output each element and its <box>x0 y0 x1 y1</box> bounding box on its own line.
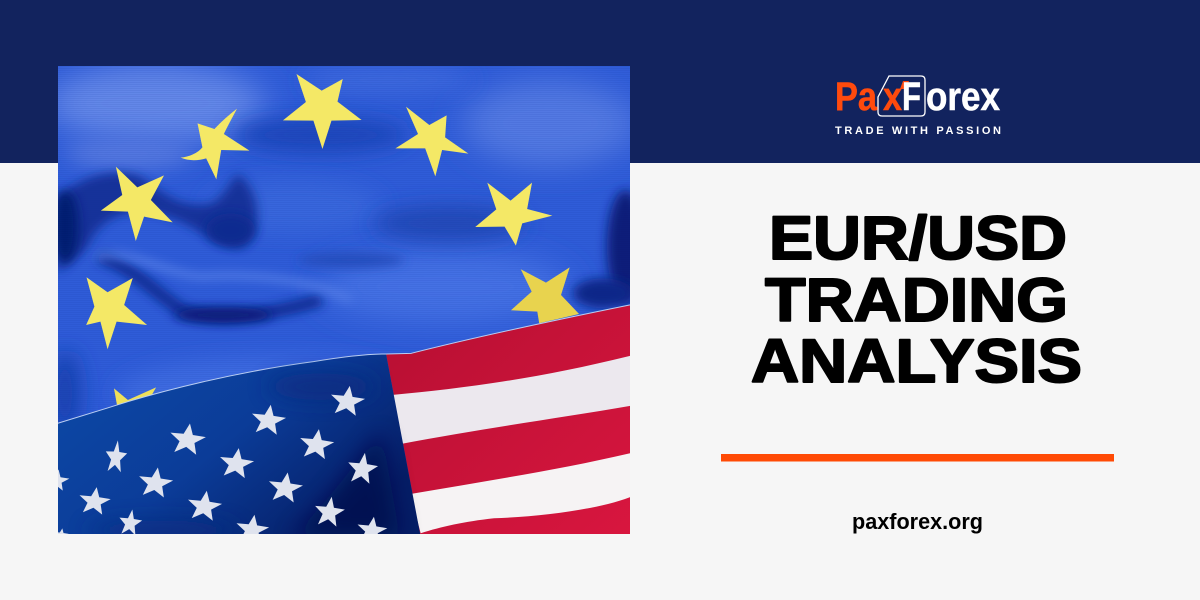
US stars <box>58 386 388 534</box>
star: left <box>101 167 173 241</box>
red stripes <box>386 303 641 537</box>
logo tagline: TRADE WITH PASSION <box>835 125 1001 137</box>
title line 2: TRADING <box>765 266 1068 334</box>
website url: paxforex.org <box>852 509 983 534</box>
canton seam highlight <box>58 303 641 423</box>
title: EUR/USD Trading Analysis <box>751 204 1082 395</box>
star: upper left <box>181 109 249 179</box>
partial EU star above seam <box>114 387 156 405</box>
title line 1: EUR/USD <box>769 204 1067 272</box>
white stripe: lower <box>410 451 641 533</box>
star: lower right <box>511 267 579 323</box>
logo wordmark: F: F <box>902 75 921 119</box>
orange divider bar <box>721 454 1114 462</box>
logo: PaxForex <box>835 75 1001 137</box>
star canton <box>58 354 421 537</box>
navy header band <box>0 0 1200 163</box>
star: top <box>283 74 362 149</box>
white stripe: upper <box>392 353 641 444</box>
title line 3: ANALYSIS <box>751 327 1082 395</box>
star: upper right <box>395 107 468 176</box>
logo wordmark: x: x <box>883 75 902 119</box>
logo slash accent <box>900 81 909 89</box>
star: lower left <box>86 277 147 349</box>
fabric folds <box>58 66 630 534</box>
US flag <box>43 303 641 544</box>
EU stars <box>86 74 579 349</box>
EU flag <box>58 66 630 534</box>
star: right <box>475 183 552 246</box>
logo wordmark: orex: orex <box>926 75 1000 119</box>
canton shadows <box>88 373 400 540</box>
photo: EU and US flags <box>58 66 630 534</box>
logo badge outline <box>878 76 925 116</box>
logo wordmark: Pa: Pa <box>835 75 878 119</box>
